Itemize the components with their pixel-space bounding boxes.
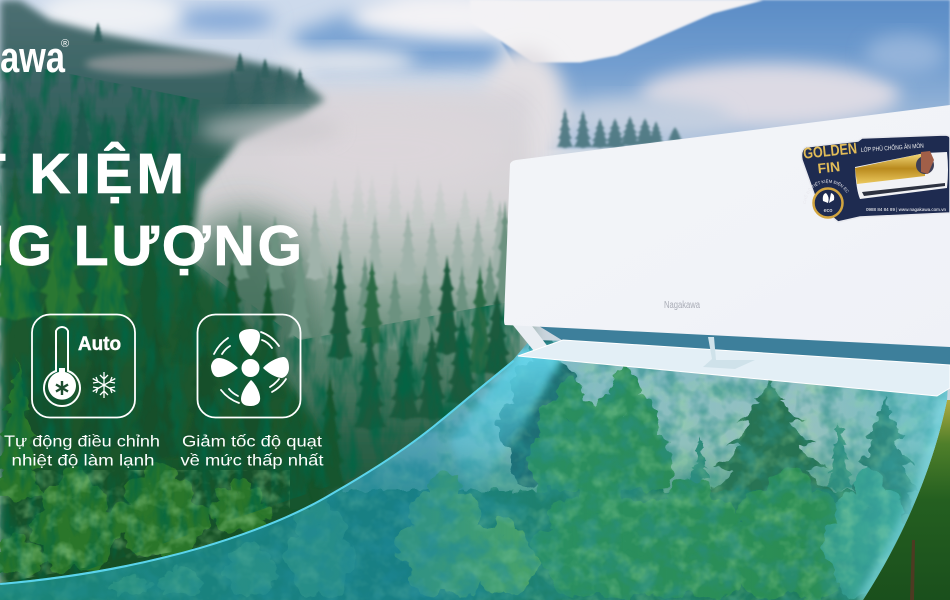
caption: auto temperature [4, 434, 160, 470]
badge AC illustration [855, 151, 948, 199]
logo: ® [61, 38, 69, 50]
badge subtitle: LỚP PHỦ CHỐNG ĂN MÒN [861, 143, 924, 154]
caption: auto temperature: nhiệt độ làm lạnh [12, 452, 154, 470]
AC flap hinge [703, 337, 755, 369]
air conditioner [504, 105, 950, 396]
AC main body [504, 105, 950, 347]
caption: auto temperature: Tự động điều chỉnh [4, 434, 160, 450]
badge title [802, 140, 859, 178]
fan motion arcs [214, 332, 286, 403]
badge title: FIN [817, 158, 841, 176]
snowflake [93, 372, 115, 398]
fan blades [211, 329, 289, 406]
thermometer bulb [48, 368, 76, 400]
badge: Golden Fin [801, 134, 950, 222]
background: far faded trees in mist [230, 155, 519, 350]
caption: fan speed [180, 434, 324, 470]
caption: fan speed: Giảm tốc độ quạt [182, 434, 323, 450]
logo [0, 33, 69, 82]
fan hub [242, 359, 260, 377]
background: lower-right forest corner [863, 400, 950, 600]
badge eco seal: eco [824, 208, 832, 214]
badge title: GOLDEN [802, 140, 858, 163]
background: misty valley [130, 90, 530, 530]
blue air wave with clear forest [0, 338, 950, 600]
badge contact strip: 0988 84 84 89 | www.nagakawa.com.vn [866, 207, 946, 213]
heading [0, 141, 305, 278]
AC open flap [518, 340, 950, 396]
auto label: Auto [78, 334, 121, 355]
badge eco seal [804, 138, 890, 219]
AC inner vent [534, 323, 950, 368]
AC side bracket [512, 324, 552, 356]
badge eco seal: CHẾ ĐỘ TIẾT KIỆM ĐIỆN ECO [804, 179, 849, 204]
mist over the valley [200, 108, 510, 192]
asterisk symbol [56, 381, 68, 395]
icon: low fan speed [198, 314, 300, 418]
thermometer [44, 327, 80, 406]
icon: auto temperature [32, 314, 135, 418]
caption: fan speed: về mức thấp nhất [180, 452, 324, 470]
AC brand label: Nagakawa [664, 300, 700, 311]
background: left conifer forest [0, 0, 530, 600]
